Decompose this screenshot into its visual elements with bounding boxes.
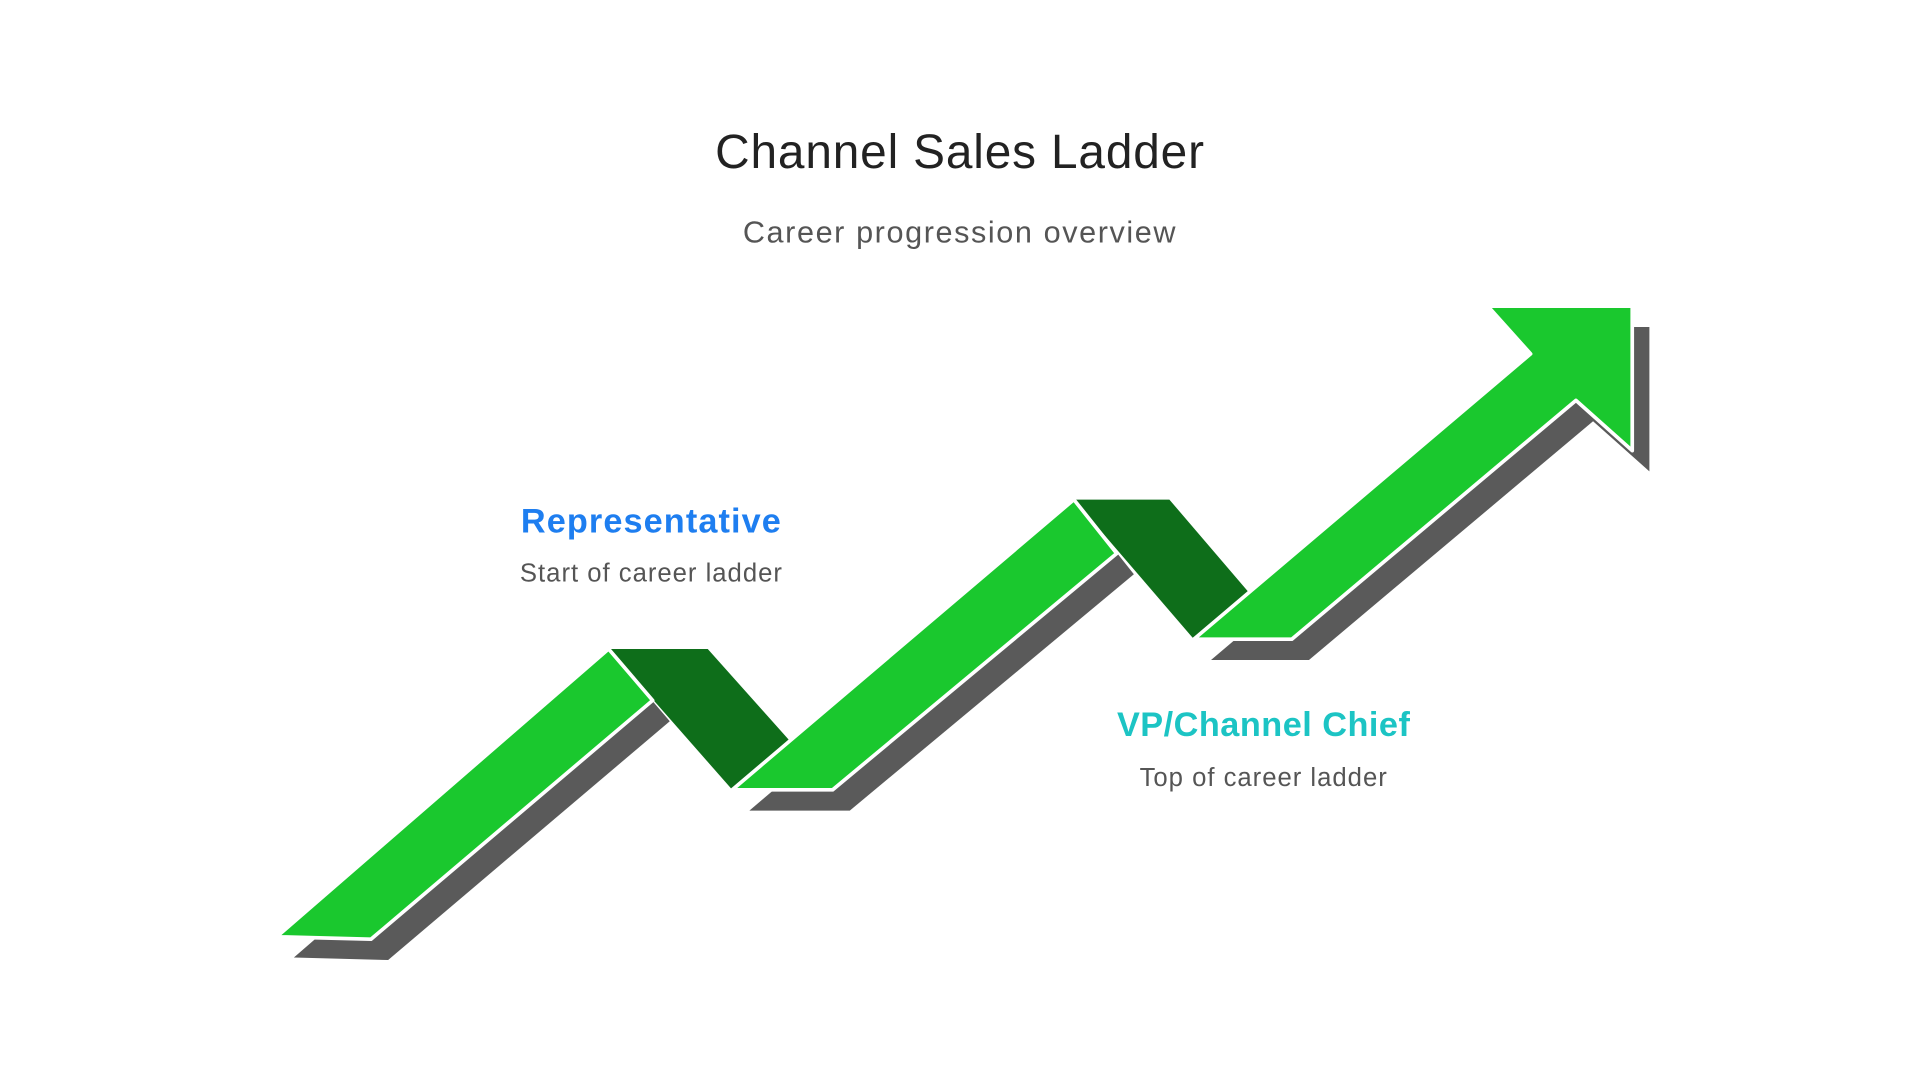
segment 2 bbox=[732, 500, 1117, 790]
shadow of arrow bbox=[294, 327, 1649, 960]
segment 1 bbox=[277, 649, 653, 939]
fold 1 (dark) bbox=[609, 649, 790, 790]
arrow chart: zigzag rising arrow bbox=[277, 306, 1649, 960]
label: Representative: Start of career ladder bbox=[520, 560, 783, 588]
label: VP/Channel Chief: Top of career ladder bbox=[1140, 764, 1388, 792]
label: VP/Channel Chief bbox=[1117, 706, 1410, 792]
subtitle: Career progression overview bbox=[743, 215, 1177, 249]
label: Representative: Representative bbox=[521, 503, 782, 541]
fold 2 (dark) bbox=[1074, 500, 1249, 639]
title: Channel Sales Ladder bbox=[715, 126, 1205, 179]
label: VP/Channel Chief: VP/Channel Chief bbox=[1117, 706, 1410, 744]
label: Representative bbox=[520, 503, 783, 588]
segment 3 with arrowhead bbox=[1194, 306, 1632, 639]
